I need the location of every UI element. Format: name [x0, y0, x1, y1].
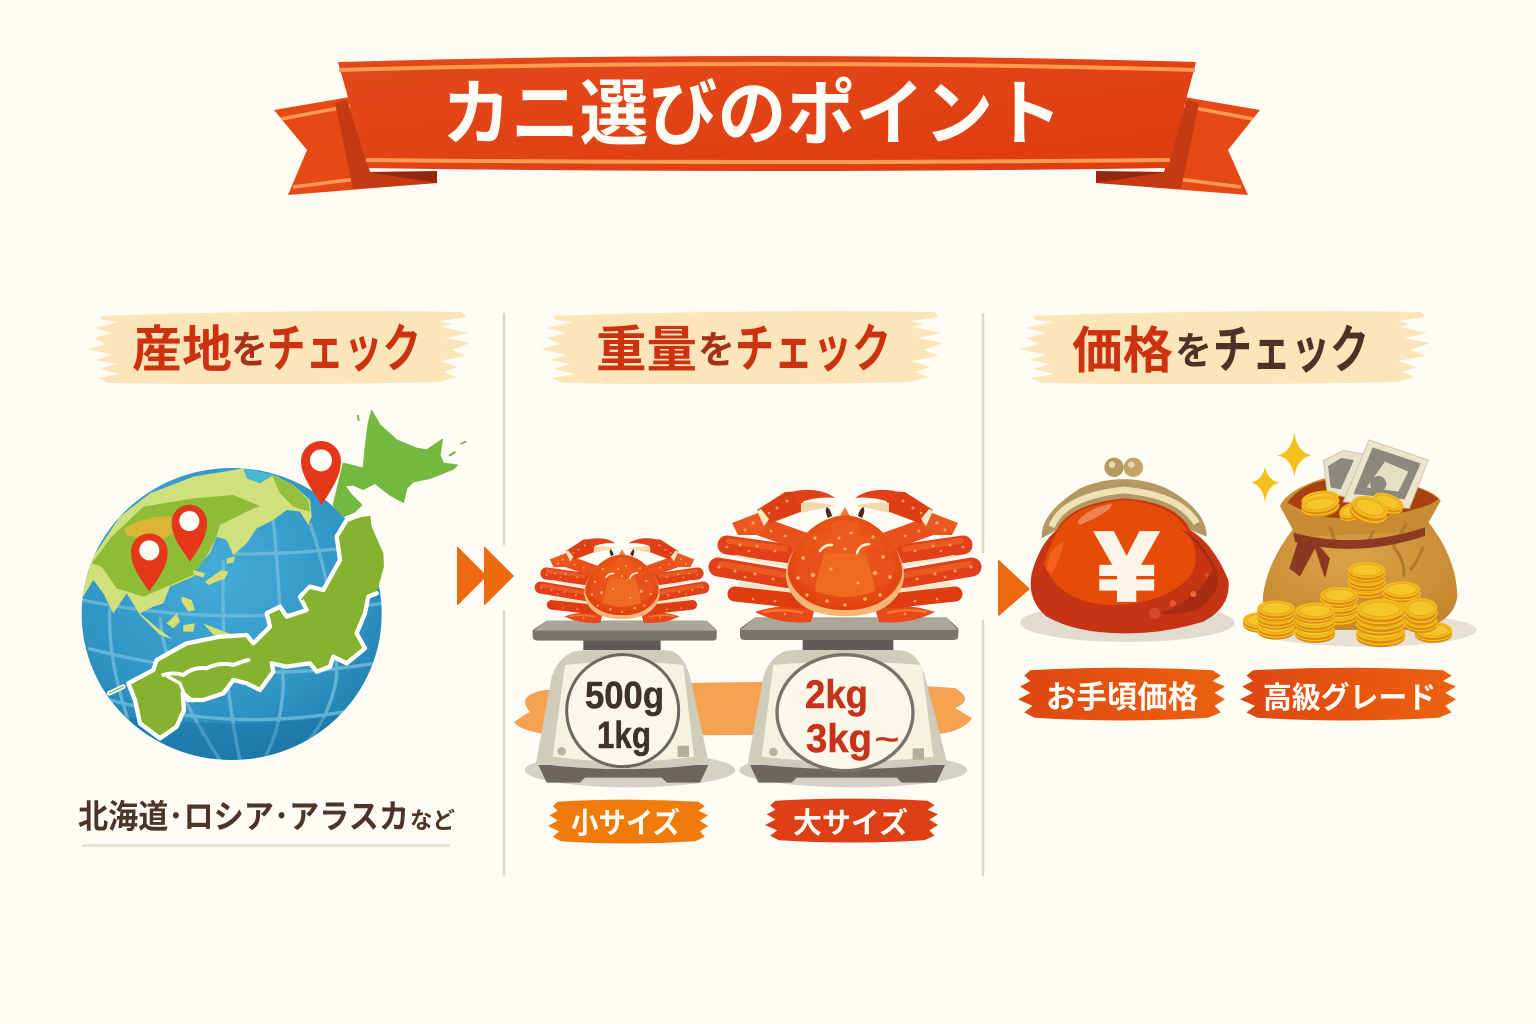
infographic canvas [78, 56, 1476, 876]
Asia continent [80, 468, 312, 639]
panel: price [1018, 311, 1477, 720]
heading: weight [541, 311, 943, 384]
label: premium grade [1240, 668, 1456, 720]
arrow: single chevron [998, 560, 1030, 616]
coin stacks [1243, 562, 1452, 647]
heading: price [1020, 311, 1430, 384]
icon: money bag with coins [1243, 433, 1477, 647]
sparkles [1251, 433, 1312, 502]
dial text: large [805, 673, 899, 761]
sack body [1263, 478, 1457, 630]
label: small size: 小サイズ [571, 806, 680, 840]
tie string [1289, 527, 1425, 578]
heading: price: を [1175, 331, 1212, 373]
dial text: small: 500g [585, 675, 664, 717]
Hokkaido [333, 411, 457, 517]
dial text: large: 3kg [806, 717, 872, 761]
ribbon left tail [274, 97, 437, 195]
dial text: large: 2kg [805, 673, 868, 717]
divider: left [503, 313, 505, 876]
heading: price: 価格 [1072, 323, 1173, 379]
sack lip [1280, 501, 1441, 537]
scale: small [525, 621, 735, 787]
heading: weight: 重量 [596, 322, 697, 378]
caption: origin regions: 北海道･ロシア･アラスカ [78, 798, 409, 835]
label: affordable: お手頃価格 [1046, 680, 1198, 715]
panel: origin [78, 311, 470, 847]
heading: weight: を [698, 330, 735, 372]
Japan map [109, 411, 467, 738]
icon: coin purse [1020, 458, 1235, 642]
caption: origin regions: など [410, 807, 455, 833]
divider: right [982, 313, 984, 876]
crab: small [540, 538, 704, 623]
globe with Japan map [80, 411, 467, 763]
scale: large [739, 617, 967, 787]
sack folds [1330, 523, 1423, 577]
label: premium grade: 高級グレード [1263, 682, 1436, 715]
crab: large [718, 490, 972, 623]
heading: origin [88, 311, 470, 384]
pin: China [172, 505, 207, 562]
heading: origin: を [231, 330, 268, 372]
panel: weight [514, 311, 972, 844]
title text: カニ選びのポイント [442, 75, 1062, 155]
dial text: large: ~ [875, 724, 899, 754]
label: affordable [1018, 668, 1225, 720]
dial text: small: 1kg [597, 715, 651, 757]
label: large size [765, 799, 938, 843]
title ribbon [274, 56, 1260, 195]
pin: Asia [131, 533, 168, 592]
label: large size: 大サイズ [793, 806, 908, 840]
label: small size [548, 800, 708, 844]
ribbon right tail [1096, 97, 1260, 195]
ribbon main band [338, 56, 1196, 171]
brush stroke behind scales [514, 682, 972, 736]
heading: origin: 産地 [132, 322, 232, 378]
coins in bag [1300, 488, 1406, 529]
arrow: double chevron [457, 547, 514, 605]
banknotes [1323, 440, 1428, 508]
heading: weight: チェック [735, 321, 891, 379]
heading: origin: チェック [267, 321, 421, 379]
heading: price: チェック [1213, 322, 1369, 380]
pin: Japan [301, 441, 341, 505]
Honshu Shikoku Kyushu [128, 513, 384, 738]
globe sphere [80, 468, 382, 763]
yen sign: ¥ [1097, 512, 1157, 620]
dial text: small [585, 675, 664, 757]
